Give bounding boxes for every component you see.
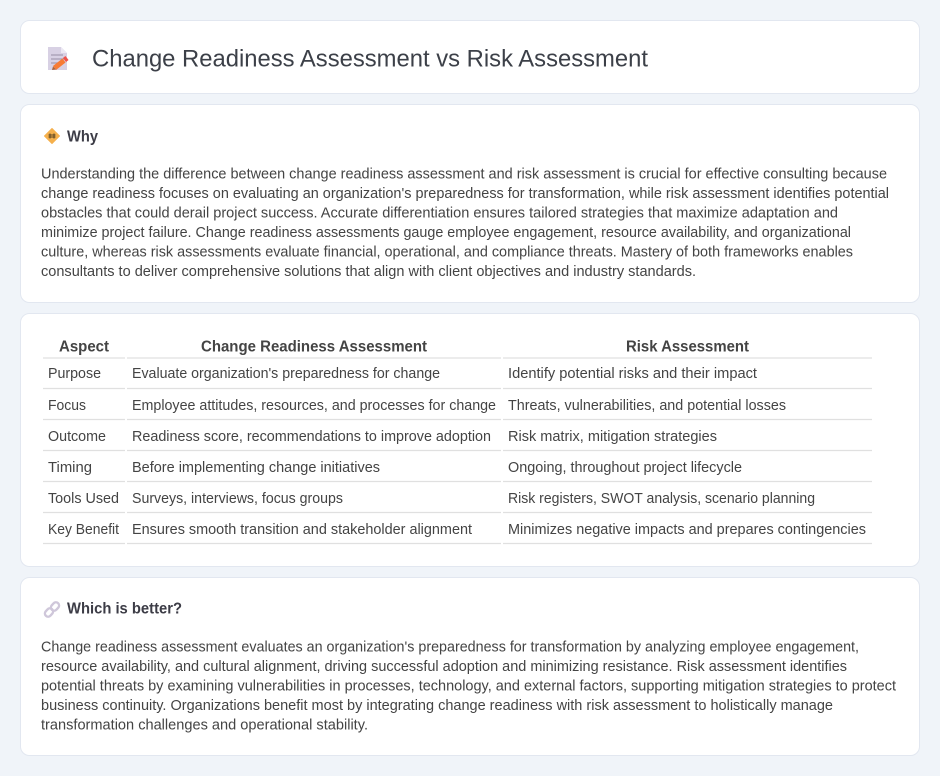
panel: title header [20, 20, 920, 94]
table row: purpose: Evaluate organization's preparedness for change [132, 366, 440, 382]
table row: timing: Timing [48, 460, 92, 476]
table row: focus: Focus [48, 398, 86, 414]
text block: why explanation: Understanding the difference between change readiness assessment and risk assessment is crucial for effective consulting because [41, 166, 887, 182]
table row: purpose: Identify potential risks and their impact [508, 366, 757, 382]
text block: why explanation [41, 166, 889, 280]
text block: verdict [41, 640, 896, 734]
panel: comparison table [20, 314, 920, 566]
table row: key benefit [48, 522, 866, 538]
table header row: Change Readiness Assessment [201, 338, 428, 356]
table row: tools used: Tools Used [48, 491, 119, 507]
text block: verdict: business continuity. Organizations benefit most by integrating change readiness with risk assessment to holistically manage [41, 698, 833, 714]
table header row: Risk Assessment [626, 338, 750, 356]
text block: verdict: Change readiness assessment evaluates an organization's preparedness for transformation by analyzing employee engagement, [41, 640, 859, 656]
heading: which is better: Which is better? [67, 600, 182, 618]
text block: verdict: potential threats by examining vulnerabilities in processes, technology, and external factors, supporting mitigation strategies to protect [41, 678, 896, 694]
table row: timing [48, 460, 742, 476]
table row: key benefit: Minimizes negative impacts and prepares contingencies [508, 522, 866, 538]
table row: focus: Threats, vulnerabilities, and potential losses [508, 398, 786, 414]
table row: outcome: Readiness score, recommendations to improve adoption [132, 429, 491, 445]
text block: why explanation: change readiness focuses on evaluating an organization's preparedness for transformation, while risk assessment identifies potential [41, 186, 889, 202]
table row: purpose [48, 366, 757, 382]
table row: tools used: Surveys, interviews, focus groups [132, 491, 343, 507]
table row: outcome: Outcome [48, 429, 106, 445]
panel: why [20, 104, 920, 302]
title: Change Readiness Assessment vs Risk Assessment [92, 46, 648, 72]
table row: tools used: Risk registers, SWOT analysis, scenario planning [508, 491, 815, 507]
table row: outcome: Risk matrix, mitigation strategies [508, 429, 717, 445]
table row: timing: Ongoing, throughout project lifecycle [508, 460, 742, 476]
text block: why explanation: obstacles that could derail project success. Accurate differentiation ensures tailored strategies that maximize adaptation and [41, 206, 838, 222]
text block: why explanation: consultants to deliver comprehensive solutions that align with client objectives and industry standards. [41, 264, 696, 280]
table row: key benefit: Ensures smooth transition and stakeholder alignment [132, 522, 472, 538]
panel: which is better [20, 578, 920, 756]
table row: tools used [48, 491, 815, 507]
text block: verdict: resource availability, and cultural alignment, driving successful adoption and minimizing resistance. Risk assessment identifies [41, 659, 847, 675]
heading: why: Why [67, 128, 98, 146]
table header row: Aspect [59, 338, 110, 356]
text block: verdict: transformation challenges and operational stability. [41, 718, 368, 734]
table row: focus: Employee attitudes, resources, and processes for change [132, 398, 496, 414]
icon: document with pencil [48, 47, 67, 70]
table row: outcome [48, 429, 717, 445]
text block: why explanation: minimize project failure. Change readiness assessments gauge employee engagement, resource availability, and organizational [41, 225, 851, 241]
table row: timing: Before implementing change initiatives [132, 460, 380, 476]
table row: key benefit: Key Benefit [48, 522, 119, 538]
icon: chain link [44, 601, 60, 618]
icon: warning diamond [44, 128, 60, 144]
table header row [59, 338, 750, 356]
text block: why explanation: culture, whereas risk assessments evaluate financial, operational, and compliance threats. Mastery of both frameworks enables [41, 244, 853, 260]
table row: purpose: Purpose [48, 366, 101, 382]
table row: focus [48, 398, 786, 414]
